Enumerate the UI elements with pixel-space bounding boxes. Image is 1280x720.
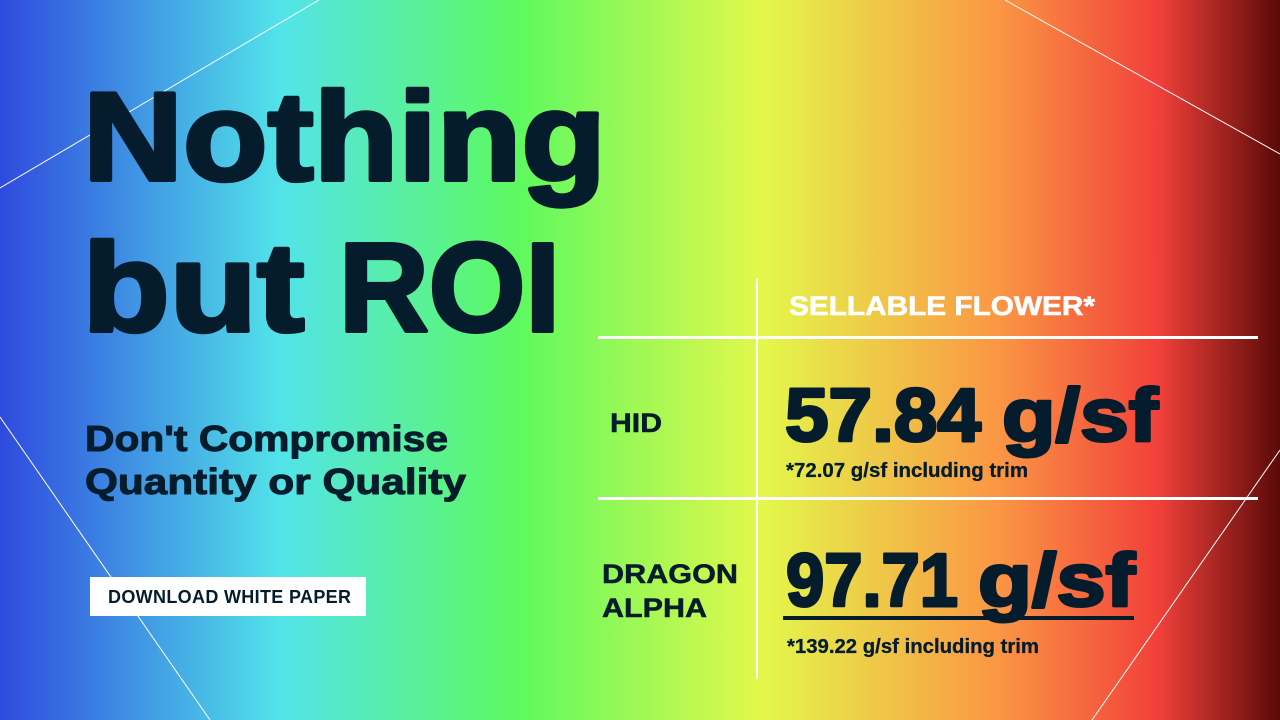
comparison table (598, 279, 1258, 679)
value underline (783, 616, 1134, 620)
title (82, 66, 606, 358)
footnote: Dragon Alpha including trim: *139.22 g/sf including trim (787, 636, 1039, 658)
row label: HID: HID (610, 408, 662, 438)
column heading: sellable flower: SELLABLE FLOWER* (789, 291, 1096, 321)
subtitle: Quantity or Quality (85, 461, 466, 502)
subtitle: Don't Compromise (85, 418, 448, 459)
download button: DOWNLOAD WHITE PAPER (108, 587, 351, 607)
row label: Dragon Alpha: DRAGON (602, 559, 738, 589)
title: Nothing (83, 66, 606, 207)
value: HID yield (785, 373, 1159, 457)
row label: Dragon Alpha: ALPHA (602, 593, 707, 623)
value: Dragon Alpha yield (786, 538, 1136, 622)
value: HID yield: 57.84 (785, 373, 981, 457)
value: Dragon Alpha yield: g/sf (978, 538, 1136, 622)
row label: Dragon Alpha (602, 559, 738, 623)
value: HID yield: g/sf (1002, 373, 1159, 457)
download button (90, 577, 366, 616)
subtitle (85, 418, 466, 502)
value: Dragon Alpha yield: 97.71 (786, 538, 958, 622)
title: ROI (339, 217, 560, 358)
footnote: HID including trim: *72.07 g/sf including trim (786, 460, 1028, 482)
title: but (82, 217, 304, 358)
table grid lines (598, 279, 1258, 679)
